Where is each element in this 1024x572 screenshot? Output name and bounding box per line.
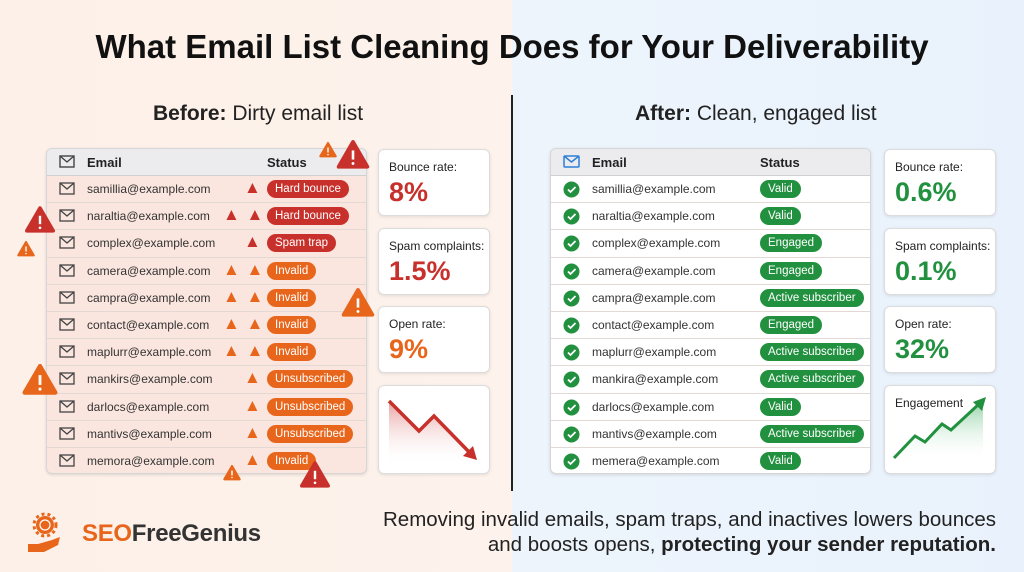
panel: after table: maplurr@example.com — [592, 345, 716, 359]
panel: before table: complex@example.com — [87, 236, 215, 250]
panel: before table: ▲ — [244, 396, 262, 414]
panel: after table: camera@example.com — [592, 264, 716, 278]
panel: before table: naraltia@example.com — [87, 209, 210, 223]
panel: after table: mankira@example.com — [592, 372, 718, 386]
panel: after table: Active subscriber — [768, 346, 856, 358]
card: spam complaints after: 0.1% — [895, 256, 957, 286]
panel: after table: Active subscriber — [768, 428, 856, 440]
panel: before table: ▲ ▲ — [223, 260, 264, 279]
card: bounce rate before: Bounce rate: — [389, 160, 457, 174]
panel: after table: Active subscriber — [768, 292, 856, 304]
panel: before table: Invalid — [275, 265, 308, 277]
panel: before table: ▲ — [244, 450, 262, 469]
panel: before table: contact@example.com — [87, 318, 209, 332]
logo — [28, 512, 261, 552]
panel: after table: Engaged — [768, 237, 814, 249]
panel: before table: ▲ — [244, 423, 262, 442]
panel: after table: mantivs@example.com — [592, 427, 717, 441]
panel: after table: naraltia@example.com — [592, 209, 715, 223]
panel: before table: ▲ ▲ — [223, 341, 264, 360]
icons: floating warning triangles — [17, 140, 374, 488]
panel: after table: Email — [592, 155, 627, 170]
panel: before table: ▲ — [244, 232, 262, 251]
panel: before table — [46, 148, 367, 474]
card: bounce rate before — [378, 149, 490, 216]
panel: before table: Invalid — [275, 455, 308, 467]
heading: after: After: Clean, engaged list — [635, 102, 877, 125]
panel: after table: Status — [760, 155, 800, 170]
card: bounce rate after — [884, 149, 996, 216]
panel: before table: Spam trap — [275, 237, 328, 249]
card: open rate before — [378, 306, 490, 373]
card: spam complaints before: Spam complaints: — [389, 239, 484, 253]
panel: before table: mantivs@example.com — [87, 427, 212, 441]
panel: before table: samillia@example.com — [87, 182, 211, 196]
panel: before table: ▲ — [244, 178, 262, 197]
panel: after table: Valid — [768, 183, 793, 195]
card: engagement chart: Engagement — [895, 396, 963, 410]
card: spam complaints before — [378, 228, 490, 295]
title: What Email List Cleaning Does for Your Deliverability — [95, 28, 929, 65]
footer text: Removing invalid emails, spam traps, and inactives lowers bounces — [383, 508, 996, 531]
panel: after table — [550, 148, 871, 474]
divider — [511, 95, 513, 491]
heading: before: Before: Dirty email list — [153, 102, 363, 125]
panel: after table: contact@example.com — [592, 318, 714, 332]
card: open rate after — [884, 306, 996, 373]
panel: before table: Hard bounce — [275, 210, 341, 222]
card: engagement chart — [884, 385, 996, 474]
panel: before table: Hard bounce — [275, 183, 341, 195]
panel: before table: Unsubscribed — [275, 400, 345, 412]
panel: after table: memera@example.com — [592, 454, 720, 468]
card: spam complaints before: 1.5% — [389, 256, 451, 286]
card: bounce rate before: 8% — [389, 177, 428, 207]
panel: before table: campra@example.com — [87, 291, 211, 305]
panel: before table: camera@example.com — [87, 264, 211, 278]
panel: before table: Unsubscribed — [275, 373, 345, 385]
card: bounce rate after: 0.6% — [895, 177, 957, 207]
card: open rate after: Open rate: — [895, 317, 952, 331]
panel: after table: samillia@example.com — [592, 182, 716, 196]
panel: before table: Email — [87, 155, 122, 170]
footer text — [383, 508, 996, 556]
panel: after table: Valid — [768, 210, 793, 222]
panel: after table: Engaged — [768, 265, 814, 277]
panel: after table: Engaged — [768, 319, 814, 331]
panel: before table: mankirs@example.com — [87, 372, 213, 386]
panel: before table: memora@example.com — [87, 454, 215, 468]
panel: before table: maplurr@example.com — [87, 345, 211, 359]
panel: before table: darlocs@example.com — [87, 400, 209, 414]
panel: after table: complex@example.com — [592, 236, 720, 250]
footer text: and boosts opens, protecting your sender reputation. — [488, 533, 996, 556]
card: declining chart — [378, 385, 490, 474]
panel: before table: ▲ ▲ — [223, 205, 264, 224]
panel: after table: campra@example.com — [592, 291, 716, 305]
panel: after table: Valid — [768, 455, 793, 467]
card: spam complaints after — [884, 228, 996, 295]
panel: before table: Status — [267, 155, 307, 170]
panel: before table: Unsubscribed — [275, 428, 345, 440]
panel: after table: Active subscriber — [768, 373, 856, 385]
card: open rate after: 32% — [895, 334, 949, 364]
panel: before table: Invalid — [275, 292, 308, 304]
panel: before table: Invalid — [275, 346, 308, 358]
card: open rate before: Open rate: — [389, 317, 446, 331]
panel: before table: ▲ ▲ — [223, 314, 264, 333]
card: spam complaints after: Spam complaints: — [895, 239, 990, 253]
panel: before table: ▲ — [244, 368, 262, 387]
panel: before table: Invalid — [275, 319, 308, 331]
panel: after table: Valid — [768, 400, 793, 412]
card: bounce rate after: Bounce rate: — [895, 160, 963, 174]
panel: after table: darlocs@example.com — [592, 400, 714, 414]
panel: before table: ▲ ▲ — [223, 287, 264, 306]
logo: SEOFreeGenius — [82, 520, 261, 547]
card: open rate before: 9% — [389, 334, 428, 364]
